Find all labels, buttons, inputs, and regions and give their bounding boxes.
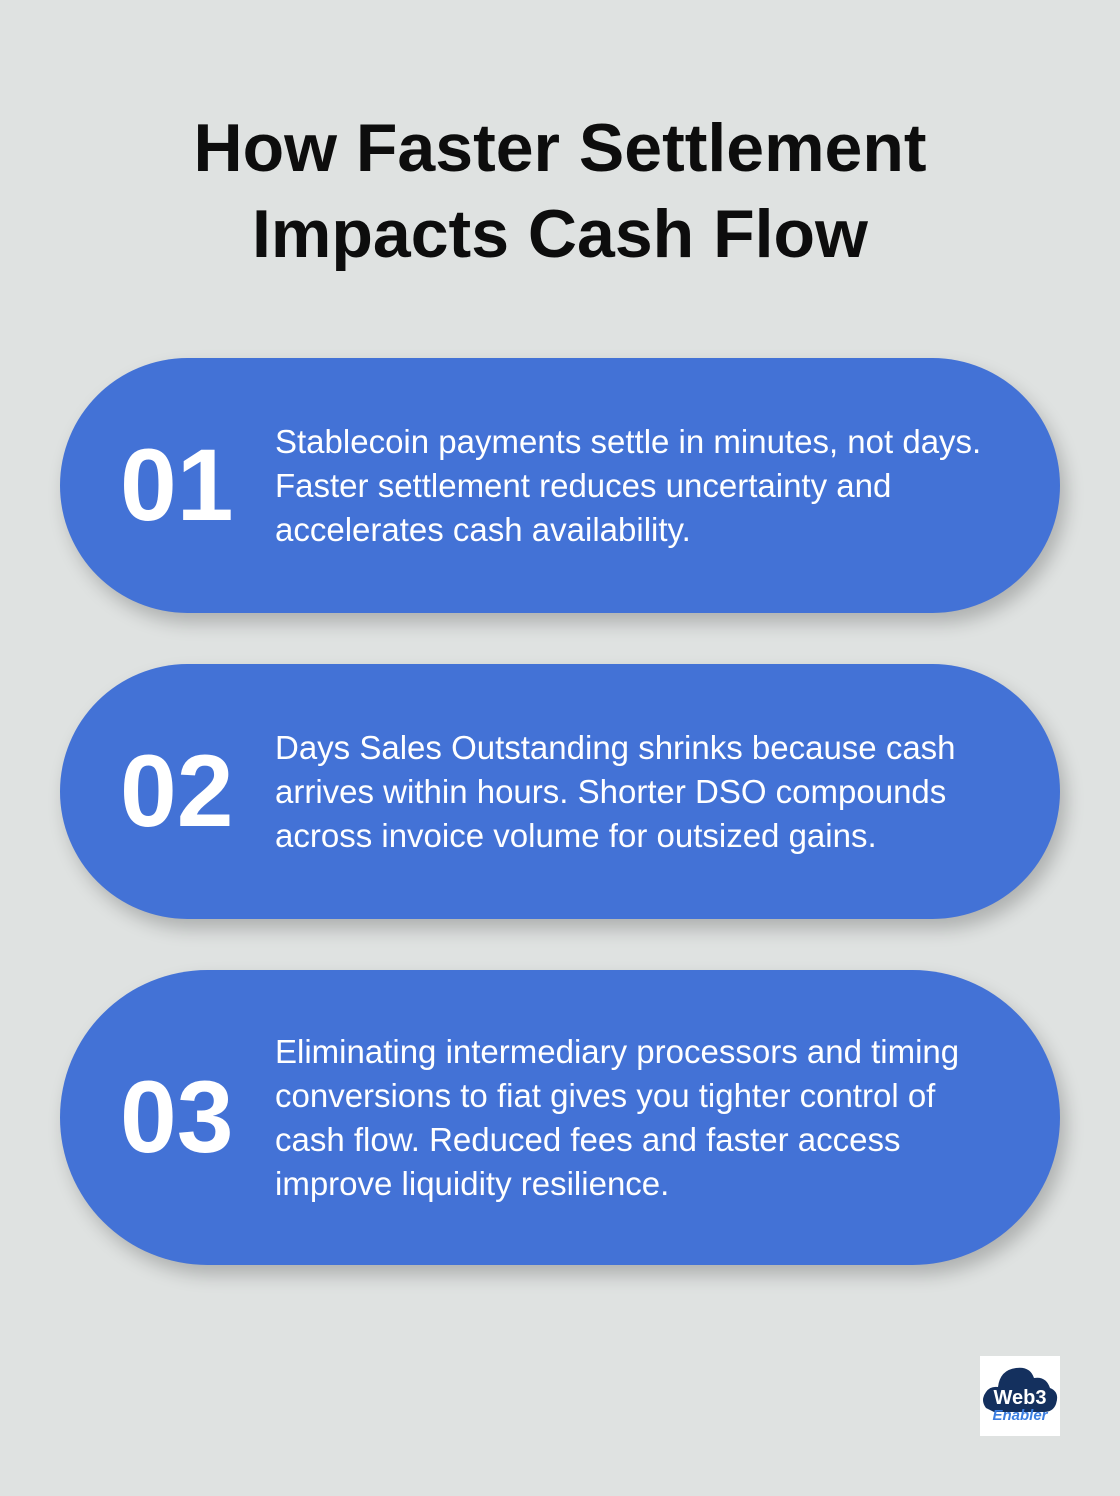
text 02: across invoice volume for outsized gains.: [275, 816, 877, 854]
number 02: 02: [120, 734, 233, 848]
text 01: Stablecoin payments settle in minutes, not days.: [275, 422, 981, 460]
text 02: [275, 728, 956, 854]
text 02: Days Sales Outstanding shrinks because cash: [275, 728, 956, 766]
text 02: arrives within hours. Shorter DSO compounds: [275, 772, 946, 810]
text 01: [275, 422, 981, 548]
title: How Faster Settlement: [193, 110, 927, 186]
icon: logo: Web3: [994, 1387, 1046, 1409]
panel: step 01: [60, 358, 1060, 613]
panel: step 03: [60, 970, 1060, 1265]
text 03: Eliminating intermediary processors and timing: [275, 1032, 959, 1070]
text 03: [275, 1032, 959, 1202]
icon: logo: [980, 1356, 1060, 1436]
text 03: conversions to fiat gives you tighter control of: [275, 1076, 935, 1114]
panel: step 02: [60, 664, 1060, 919]
number 03: 03: [120, 1060, 233, 1174]
icon: logo: Enabler: [992, 1407, 1049, 1424]
text 01: accelerates cash availability.: [275, 510, 691, 548]
text 03: cash flow. Reduced fees and faster access: [275, 1120, 901, 1158]
text 01: Faster settlement reduces uncertainty and: [275, 466, 891, 504]
title: Impacts Cash Flow: [252, 196, 868, 272]
title: [193, 110, 927, 272]
number 01: 01: [120, 428, 233, 542]
text 03: improve liquidity resilience.: [275, 1164, 669, 1202]
